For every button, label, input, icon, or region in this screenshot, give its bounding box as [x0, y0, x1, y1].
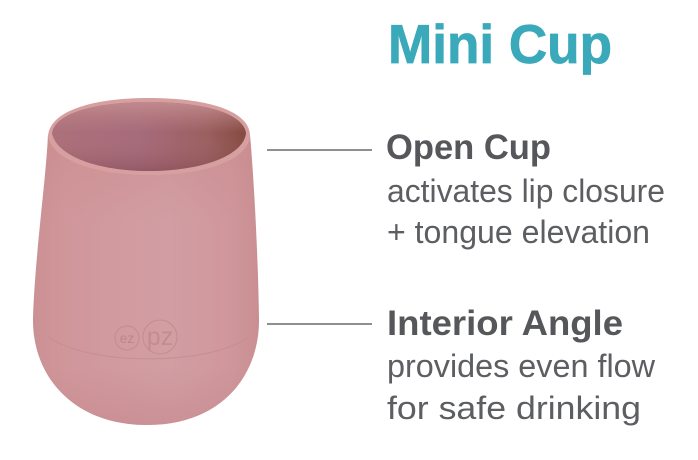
callout: interior angle: provides even flow	[387, 348, 656, 384]
callout: interior angle: for safe drinking	[387, 390, 641, 426]
callout: open cup: activates lip closure	[387, 173, 665, 209]
embossed logo	[115, 320, 177, 354]
cup interior	[52, 102, 246, 171]
embossed logo: ez	[120, 330, 134, 346]
embossed logo: pz	[147, 323, 173, 351]
product photo: pink mini cup	[33, 98, 259, 425]
leader line: interior angle	[267, 323, 372, 325]
cup body	[33, 135, 259, 425]
callout: interior angle	[387, 304, 656, 426]
callout: interior angle: Interior Angle	[387, 304, 623, 343]
title: Mini Cup	[388, 13, 612, 75]
callout: open cup: Open Cup	[386, 128, 551, 167]
leader line: open cup	[267, 149, 372, 151]
callout: open cup: + tongue elevation	[387, 214, 650, 250]
base seam	[48, 337, 248, 359]
callout: open cup	[386, 128, 665, 250]
cup rim	[48, 98, 250, 175]
